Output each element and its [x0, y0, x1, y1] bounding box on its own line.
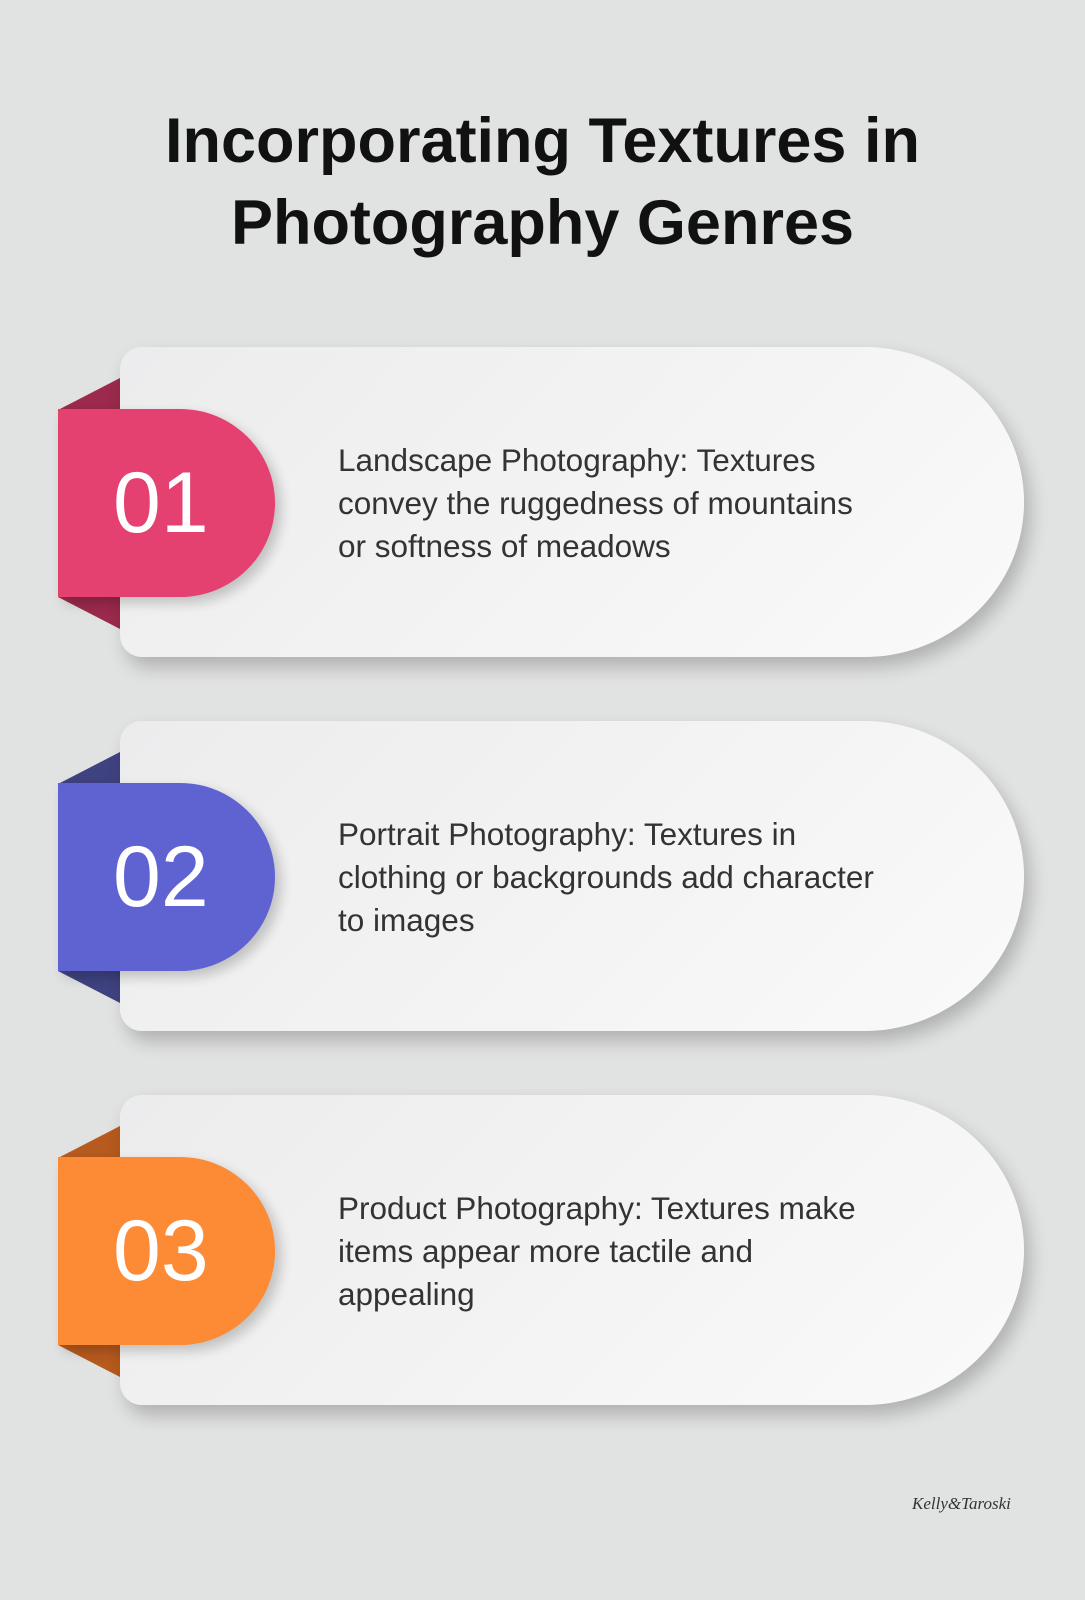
signature logo: Kelly&Taroski: [912, 1494, 1011, 1513]
panel: item 02: [58, 721, 1038, 1050]
badge 03: 03: [113, 1203, 209, 1299]
text 01: convey the ruggedness of mountains: [338, 485, 853, 521]
badge 01: [58, 409, 275, 597]
fold bottom: [58, 597, 120, 629]
card: [120, 1095, 1024, 1405]
badge 01: 01: [113, 455, 209, 551]
text 03: items appear more tactile and: [338, 1233, 753, 1269]
panel: item 01: [58, 347, 1038, 676]
title: Photography Genres: [231, 188, 854, 258]
text 01: or softness of meadows: [338, 528, 671, 564]
text 01: Landscape Photography: Textures: [338, 442, 816, 478]
card: [120, 721, 1024, 1031]
text 02: [338, 816, 874, 938]
fold bottom: [58, 971, 120, 1003]
fold bottom: [58, 1345, 120, 1377]
card: [120, 347, 1024, 657]
badge 03: [58, 1157, 275, 1345]
text 03: Product Photography: Textures make: [338, 1190, 856, 1226]
fold top: [60, 378, 120, 409]
badge 02: [58, 783, 275, 971]
text 02: clothing or backgrounds add character: [338, 859, 874, 895]
panel: item 03: [58, 1095, 1038, 1424]
text 02: Portrait Photography: Textures in: [338, 816, 796, 852]
fold top: [60, 752, 120, 783]
title: Incorporating Textures in: [165, 106, 920, 176]
text 03: [338, 1190, 856, 1312]
fold top: [60, 1126, 120, 1157]
text 03: appealing: [338, 1276, 475, 1312]
text 02: to images: [338, 902, 475, 938]
badge 02: 02: [113, 829, 209, 925]
text 01: [338, 442, 853, 564]
title: [165, 106, 920, 258]
